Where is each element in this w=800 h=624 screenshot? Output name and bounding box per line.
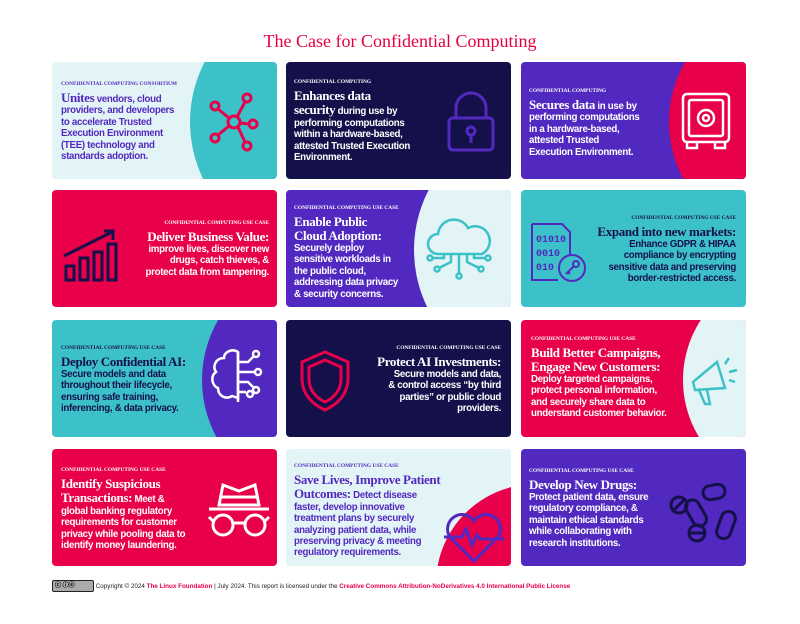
text: secures: CONFIDENTIAL COMPUTING — [529, 88, 606, 94]
text: drugs — [529, 468, 648, 549]
icon: megaphone — [692, 357, 738, 406]
text: save lives: Outcomes: Detect disease — [294, 486, 417, 501]
text: unites: standards adoption. — [61, 151, 148, 162]
text: cloud: & security concerns. — [294, 289, 383, 300]
panel: protect ai investments — [286, 320, 511, 437]
text: expand: compliance by encrypting — [624, 250, 736, 261]
text: confidential ai: Deploy Confidential AI: — [61, 354, 186, 369]
text: drugs: research institutions. — [529, 538, 620, 549]
text: enhances: Enhances data — [294, 88, 371, 103]
text: enhances: Environment. — [294, 152, 352, 163]
text: save lives: Save Lives, Improve Patient — [294, 472, 440, 487]
text: drugs: regulatory compliance, & — [529, 503, 638, 514]
text: deliver: improve lives, discover new — [148, 244, 269, 255]
text: confidential ai: inferencing, & data privacy. — [61, 403, 178, 414]
panel: consortium unites — [52, 62, 277, 179]
text: drugs: while collaborating with — [529, 526, 632, 537]
text: suspicious: global banking regulatory — [61, 506, 172, 517]
text: save lives: analyzing patient data, while — [294, 525, 416, 536]
icon: safe — [682, 92, 730, 150]
text: protect ai: Protect AI Investments: — [377, 354, 501, 369]
text: campaigns: and securely share data to — [531, 397, 645, 408]
text: protect ai: Secure models and data, — [394, 369, 501, 380]
text: drugs: Develop New Drugs: — [529, 477, 637, 492]
text: drugs: CONFIDENTIAL COMPUTING USE CASE — [529, 468, 634, 474]
icon: brain circuit — [211, 349, 262, 402]
icon: cloud — [426, 218, 492, 280]
text: save lives: regulatory requirements. — [294, 547, 401, 558]
text: enhances: attested Trusted Execution — [294, 141, 410, 152]
title: The Case for Confidential Computing — [264, 31, 536, 51]
text: cloud: Cloud Adoption: — [294, 228, 382, 243]
text: suspicious: privacy while pooling data to — [61, 529, 185, 540]
text: deliver: protect data from tampering. — [146, 267, 269, 278]
text: enhances: within a hardware-based, — [294, 129, 403, 140]
panel: secures data — [521, 62, 746, 179]
text: cloud: sensitive workloads in — [294, 254, 391, 265]
text: suspicious: CONFIDENTIAL COMPUTING USE CASE — [61, 467, 166, 473]
text: suspicious: identify money laundering. — [61, 540, 176, 551]
text: enhances — [294, 79, 410, 163]
text: protect ai — [377, 345, 501, 414]
text: unites: to accelerate Trusted — [61, 117, 152, 128]
text: secures: performing computations — [529, 112, 639, 123]
text: enhances: CONFIDENTIAL COMPUTING — [294, 79, 371, 85]
panel: expand into new markets — [521, 190, 746, 307]
panel: deploy confidential ai — [52, 320, 277, 437]
icon: binary key — [531, 223, 586, 282]
icon: cc badge — [52, 580, 94, 592]
text: campaigns: Deploy targeted campaigns, — [531, 374, 652, 385]
text: enhances: security during use by — [294, 102, 397, 117]
text: cloud: CONFIDENTIAL COMPUTING USE CASE — [294, 205, 399, 211]
text: secures: Execution Environment. — [529, 147, 633, 158]
icon: binary key: 010 — [536, 263, 554, 274]
text: protect ai: CONFIDENTIAL COMPUTING USE CASE — [396, 345, 501, 351]
text: protect ai: parties” or public cloud — [399, 392, 501, 403]
text: expand: sensitive data and preserving — [608, 262, 736, 273]
text: unites: (TEE) technology and — [61, 140, 155, 151]
text: protect ai: providers. — [457, 403, 501, 414]
text: cloud: the public cloud, — [294, 266, 366, 277]
text: save lives — [294, 463, 441, 558]
icon: binary key: 0010 — [536, 249, 560, 260]
text: campaigns — [531, 336, 667, 419]
text: cloud: Securely deploy — [294, 243, 364, 254]
panel: enable public cloud — [286, 190, 511, 307]
text: deliver: CONFIDENTIAL COMPUTING USE CASE — [164, 220, 269, 226]
icon: spy hat glasses — [208, 483, 270, 536]
text: save lives: CONFIDENTIAL COMPUTING USE CASE — [294, 463, 399, 469]
text: suspicious — [61, 467, 186, 551]
text: unites: Unites vendors, cloud — [61, 90, 161, 105]
text: campaigns: Build Better Campaigns, — [531, 345, 660, 360]
icon: pills — [670, 482, 737, 542]
text: drugs: Protect patient data, ensure — [529, 492, 648, 503]
text: drugs: maintain ethical standards — [529, 515, 643, 526]
text: confidential ai: ensuring safe training, — [61, 392, 158, 403]
icon: network — [210, 92, 258, 152]
text: confidential ai: Secure models and data — [61, 369, 166, 380]
icon: heart pulse — [444, 513, 504, 563]
text: unites: providers, and developers — [61, 105, 174, 116]
icon: padlock — [448, 92, 494, 152]
text: expand: Enhance GDPR & HIPAA — [629, 239, 736, 250]
text: save lives: faster, develop innovative — [294, 502, 405, 513]
text: cloud: Enable Public — [294, 214, 367, 229]
text: campaigns: protect personal information, — [531, 385, 657, 396]
text: unites — [61, 81, 177, 162]
text: secures — [529, 88, 640, 158]
panel: build better campaigns — [521, 320, 746, 437]
footer: license: Copyright © 2024 The Linux Foundation | July 2024. This report is licensed under the Creative Commons Attribution-NoDerivatives 4.0 International Public License — [96, 583, 570, 590]
text: confidential ai: CONFIDENTIAL COMPUTING USE CASE — [61, 345, 166, 351]
panel: deliver business value — [52, 190, 277, 307]
text: suspicious: Identify Suspicious — [61, 476, 160, 491]
text: suspicious: Transactions: Meet & — [61, 490, 164, 505]
text: suspicious: requirements for customer — [61, 517, 177, 528]
text: campaigns: understand customer behavior. — [531, 408, 667, 419]
text: unites: Execution Environment — [61, 128, 163, 139]
text: expand: CONFIDENTIAL COMPUTING USE CASE — [631, 215, 736, 221]
panel: enhances data security — [286, 62, 511, 179]
text: campaigns: Engage New Customers: — [531, 359, 660, 374]
text: expand: border-restricted access. — [628, 273, 736, 284]
text: confidential ai: throughout their lifecycle, — [61, 380, 172, 391]
icon: binary key: 01010 — [536, 235, 566, 246]
panel: identify suspicious transactions — [52, 449, 277, 566]
text: save lives: preserving privacy & meeting — [294, 536, 421, 547]
panel: develop new drugs — [521, 449, 746, 566]
text: deliver — [146, 220, 270, 278]
text: secures: Secures data in use by — [529, 97, 637, 112]
text: secures: in a hardware-based, — [529, 124, 619, 135]
footer: license — [52, 580, 570, 592]
text: expand: Expand into new markets: — [597, 224, 736, 239]
panel: save lives — [286, 449, 511, 566]
text: cloud — [294, 205, 399, 300]
text: deliver: Deliver Business Value: — [147, 229, 269, 244]
text: save lives: treatment plans by securely — [294, 513, 414, 524]
text: deliver: drugs, catch thieves, & — [170, 255, 269, 266]
text: cloud: addressing data privacy — [294, 277, 398, 288]
text: expand — [597, 215, 736, 284]
text: confidential ai — [61, 345, 186, 414]
text: enhances: performing computations — [294, 118, 404, 129]
text: campaigns: CONFIDENTIAL COMPUTING USE CASE — [531, 336, 636, 342]
icon: shield — [300, 350, 350, 412]
text: unites: CONFIDENTIAL COMPUTING CONSORTIUM — [61, 81, 177, 87]
icon: cc badge: ⓒ ⓘⓔ — [55, 583, 75, 589]
text: protect ai: & control access “by third — [388, 380, 501, 391]
text: secures: attested Trusted — [529, 135, 599, 146]
icon: growth chart — [63, 230, 118, 282]
